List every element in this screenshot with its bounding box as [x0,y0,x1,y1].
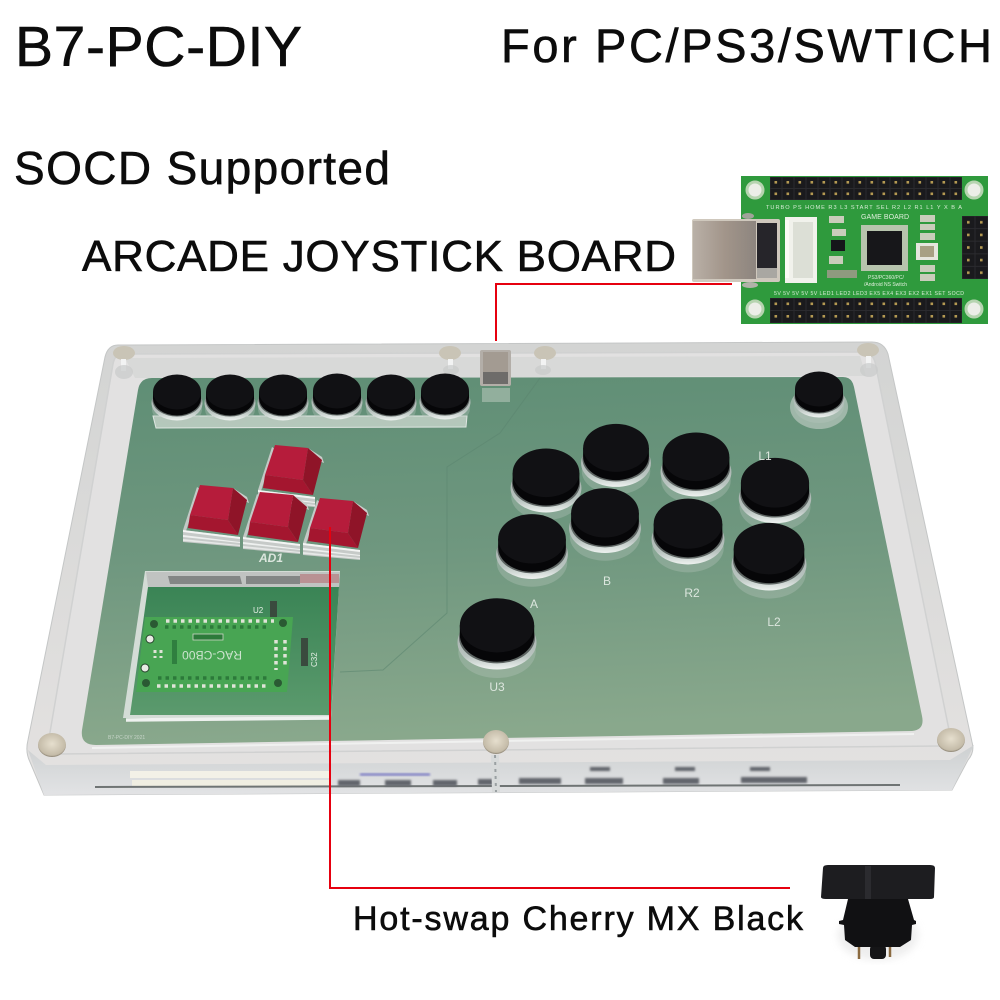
plate button labels: U3 [489,680,505,694]
top pin header [770,177,962,200]
plate button labels [258,449,781,694]
panel: game board photo [692,176,988,324]
panel: joystick case [27,342,974,795]
case inner bevel [48,352,950,754]
plate button labels: A [530,597,538,611]
plate button labels: AD1 [258,551,283,565]
top right button [790,372,848,429]
case top surface [27,342,973,795]
mounting holes [747,182,982,317]
crystal [916,243,938,260]
top header labels: TURBO PS HOME R3 L3 START SEL R2 L2 R1 L1 Y X B A [766,205,962,211]
switch stem [870,945,886,959]
main action buttons [457,424,811,678]
C32 component: C32 [310,652,319,667]
bottom header labels: 5V 5V 5V 5V 5V LED1 LED2 LED3 EX5 EX4 EX3 EX2 EX1 SET SOCD [774,291,964,297]
screws on top edge [113,343,879,379]
platform note: PS3/PC360/PC/ [868,275,904,281]
plate button labels: L1 [758,449,772,463]
plate button labels: L2 [767,615,781,629]
text: Arcade Joystick Board: ARCADE JOYSTICK BOARD [82,232,676,281]
title: B7-PC-DIY: B7-PC-DIY [15,15,302,79]
plate button labels: B [603,574,611,588]
acrylic window with control board [123,571,340,720]
heading: platform compatibility: For PC/PS3/SWTICH [501,19,992,72]
red direction keys [183,445,369,560]
C32 component [301,638,319,667]
regulator [831,240,845,251]
front face of case [28,745,974,795]
white connector [785,217,817,283]
U2 component [253,601,277,617]
PCB [741,176,988,324]
USB-B plug [692,213,780,288]
screws on front edge [38,728,965,792]
text: switch caption: Hot-swap Cherry MX Black [353,900,804,938]
red callout line to switch [330,527,790,888]
small green board [136,617,293,692]
plate trace line [340,378,540,672]
bottom pin header [770,298,962,323]
plate button labels: R2 [684,586,700,600]
acrylic top band [125,356,866,378]
right pin header [962,216,988,279]
U2 component: U2 [253,606,264,615]
text: SOCD Supported: SOCD Supported [14,142,390,194]
switch pins [858,945,860,959]
switch pin 2 [889,945,891,957]
icon: button with Cherry MX switch [821,865,935,960]
plate edge highlight [92,734,914,748]
microcontroller chip [861,225,908,271]
green plate [82,377,923,745]
game board title: GAME BOARD [861,214,909,221]
platform note 2: /Android NS Switch [864,282,907,288]
switch housing [839,899,916,947]
board label: RAC-CB00 [182,648,242,662]
plate small print: B7-PC-DIY 2021 [108,735,145,741]
button cap [821,865,935,899]
USB port on case [480,350,511,402]
cap highlight [865,866,871,899]
red callout line to game board [496,284,732,341]
row of six small buttons [152,374,470,426]
small SMD parts [827,215,935,281]
top button acrylic bar [153,416,467,428]
